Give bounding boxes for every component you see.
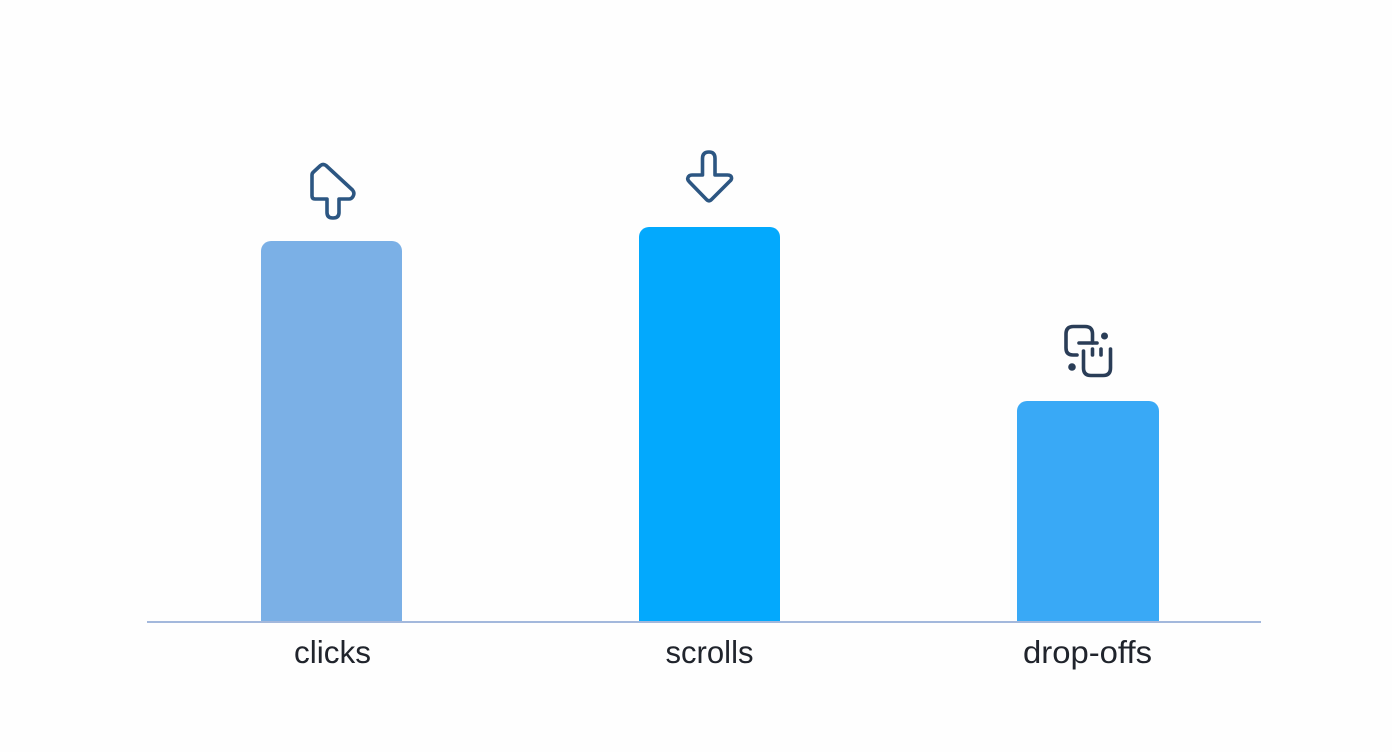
bar: scrolls (639, 227, 780, 622)
icon: down arrow (688, 152, 732, 201)
icon: drop-off tap (1066, 326, 1110, 376)
label: clicks: clicks (294, 634, 371, 670)
label: scrolls: scrolls (666, 634, 754, 670)
icon: pointer arrow (312, 164, 354, 218)
label: drop-offs: drop-offs (1023, 634, 1152, 670)
bar: drop-offs (1017, 401, 1159, 622)
bar: clicks (261, 241, 402, 622)
axis baseline (147, 621, 1261, 623)
